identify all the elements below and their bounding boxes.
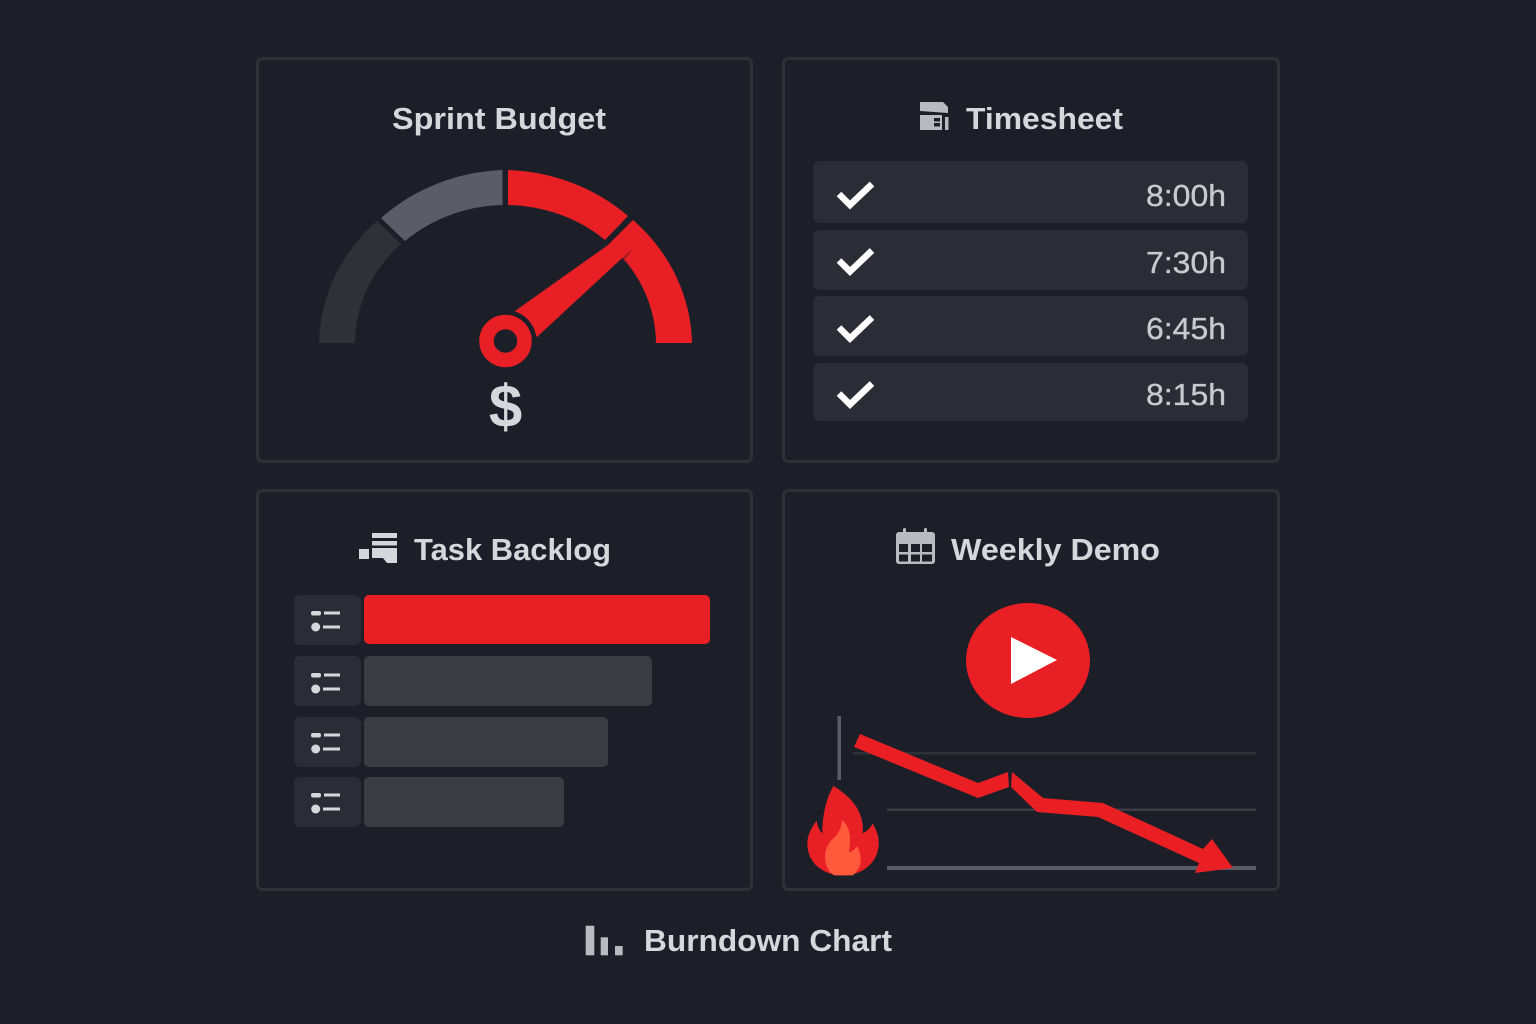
backlog row 4 (294, 777, 564, 827)
row: 7:30h (813, 230, 1248, 290)
burndown line (854, 734, 1233, 873)
row: 8:00h (813, 161, 1248, 223)
row: 8:15h: 8:15h (1146, 377, 1226, 412)
chart axis (838, 716, 841, 780)
panel: task backlog (258, 490, 752, 890)
gauge segment: mid (381, 170, 502, 241)
gauge segment: over budget (622, 220, 692, 343)
icon: play button (966, 603, 1090, 718)
icon: calendar (896, 528, 935, 564)
dollar sign: $ (489, 373, 522, 440)
backlog row 3 (294, 717, 608, 767)
heading: timesheet: Timesheet (966, 101, 1123, 136)
heading: sprint budget: Sprint Budget (392, 101, 606, 136)
backlog row 2 (294, 656, 652, 706)
panel: weekly demo (784, 490, 1278, 890)
row: 6:45h (813, 296, 1248, 356)
footer: burndown chart label (586, 923, 892, 958)
gauge (319, 170, 692, 440)
icon: bars (586, 926, 623, 955)
row: 8:15h (813, 363, 1248, 421)
heading: weekly demo: Weekly Demo (951, 532, 1160, 567)
gauge needle (474, 220, 637, 372)
icon: flame (807, 786, 879, 875)
panel: sprint budget (258, 58, 752, 462)
row: 8:00h: 8:00h (1146, 178, 1226, 213)
icon: timesheet (920, 102, 948, 130)
gauge segment: high (508, 170, 628, 240)
backlog row 1 (294, 595, 710, 645)
chart grid lines (853, 752, 1256, 870)
icon: task backlog (359, 533, 397, 563)
panel: timesheet (784, 58, 1278, 462)
gauge segment: low (319, 221, 401, 343)
heading: task backlog: Task Backlog (414, 532, 611, 567)
row: 7:30h: 7:30h (1146, 245, 1226, 280)
heading: burndown chart: Burndown Chart (644, 923, 892, 958)
row: 6:45h: 6:45h (1146, 311, 1226, 346)
burndown chart (807, 716, 1256, 875)
